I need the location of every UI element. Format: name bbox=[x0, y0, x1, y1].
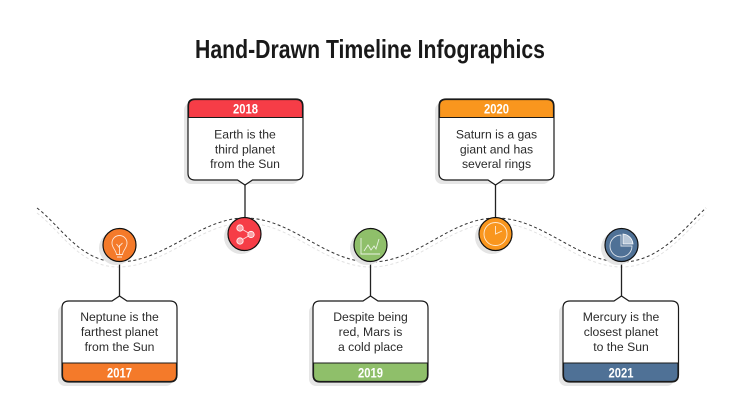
icon: light bulb bbox=[99, 228, 136, 265]
card 2017 bbox=[58, 296, 177, 386]
text 2020: giant and has bbox=[460, 142, 533, 156]
text 2021: to the Sun bbox=[593, 340, 649, 354]
text 2017: from the Sun bbox=[85, 340, 154, 354]
card 2021 bbox=[559, 296, 678, 386]
milestone 2019 bbox=[309, 228, 428, 386]
dashed timeline curve bbox=[37, 208, 706, 267]
text 2020: Saturn is a gas bbox=[456, 128, 537, 142]
connector 2017 bbox=[118, 262, 120, 296]
text 2021: Mercury is the bbox=[583, 310, 659, 324]
milestone 2021 bbox=[559, 228, 678, 386]
card 2020 bbox=[435, 99, 554, 185]
title: Hand-Drawn Timeline Infographics bbox=[195, 34, 545, 64]
icon: share nodes bbox=[224, 218, 261, 254]
milestone 2020 bbox=[435, 99, 554, 254]
icon: pie chart bbox=[601, 228, 638, 265]
icon: line chart bbox=[350, 228, 387, 265]
text 2017: Neptune is the bbox=[80, 310, 159, 324]
header band 2018: 2018 bbox=[233, 100, 258, 116]
card 2018 bbox=[184, 99, 303, 185]
text 2020: several rings bbox=[462, 157, 531, 171]
text 2018: third planet bbox=[215, 142, 276, 156]
header band 2017: 2017 bbox=[107, 364, 132, 380]
connector 2020 bbox=[494, 185, 496, 218]
connector 2021 bbox=[620, 262, 622, 296]
header band 2020: 2020 bbox=[484, 100, 509, 116]
text 2021: closest planet bbox=[584, 325, 659, 339]
header band 2021: 2021 bbox=[608, 364, 634, 380]
text 2019: a cold place bbox=[338, 340, 403, 354]
milestone 2017 bbox=[58, 228, 177, 386]
milestone 2018 bbox=[184, 99, 303, 254]
text 2018: from the Sun bbox=[210, 157, 280, 171]
header band 2019: 2019 bbox=[358, 364, 383, 380]
connector 2019 bbox=[370, 262, 372, 296]
text 2017: farthest planet bbox=[81, 325, 159, 339]
connector 2018 bbox=[244, 185, 246, 218]
text 2019: red, Mars is bbox=[339, 325, 402, 339]
card 2019 bbox=[309, 296, 428, 386]
text 2019: Despite being bbox=[333, 310, 408, 324]
icon: clock bbox=[475, 218, 512, 254]
text 2018: Earth is the bbox=[214, 128, 276, 142]
